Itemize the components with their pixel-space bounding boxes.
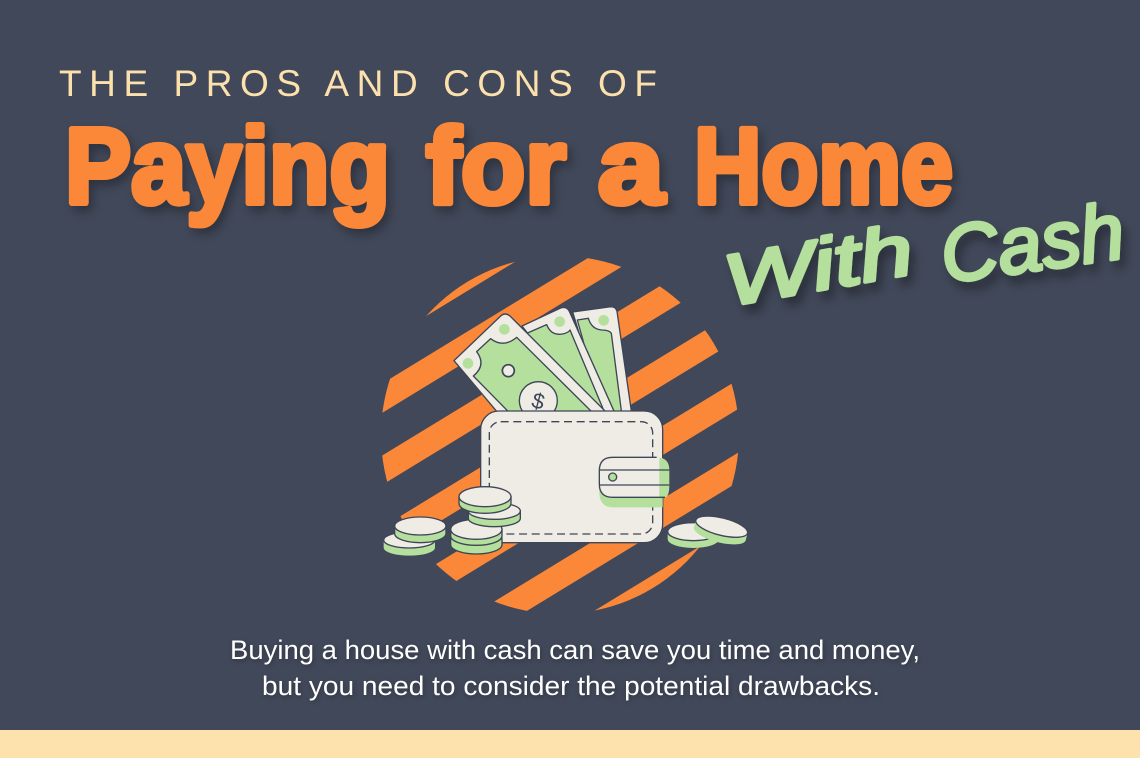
heading: the pros and cons of: THE PROS AND CONS OF bbox=[59, 63, 657, 104]
wallet stitching bbox=[489, 422, 653, 534]
title word: for: for bbox=[426, 105, 566, 226]
banknote: back bbox=[573, 307, 632, 413]
title word: paying: Paying bbox=[65, 105, 390, 226]
striped orange circle bbox=[382, 258, 738, 611]
title word: home: Home bbox=[694, 105, 953, 226]
paragraph line 2: but you need to consider the potential drawbacks. bbox=[262, 671, 880, 701]
coins: left pile bbox=[384, 517, 446, 556]
intro paragraph bbox=[230, 635, 920, 701]
paragraph line 1: Buying a house with cash can save you time and money, bbox=[230, 635, 920, 665]
wallet body bbox=[481, 411, 663, 543]
bottom cream band bbox=[0, 730, 1140, 758]
title: with cash bbox=[718, 186, 1130, 322]
banknote: front: $ bbox=[529, 387, 547, 415]
wallet clasp bbox=[599, 457, 669, 507]
title word: a: a bbox=[598, 105, 665, 226]
banknote: middle bbox=[522, 307, 615, 413]
banknotes bbox=[454, 307, 632, 420]
coins: middle stack bbox=[451, 487, 520, 554]
banknote: front bbox=[454, 314, 607, 420]
illustration: wallet with cash and coins bbox=[382, 258, 747, 611]
script word: with: With bbox=[718, 210, 919, 322]
script word: cash: Cash bbox=[935, 186, 1130, 300]
title: paying for a home bbox=[65, 105, 953, 226]
coins: right pile bbox=[668, 512, 750, 549]
